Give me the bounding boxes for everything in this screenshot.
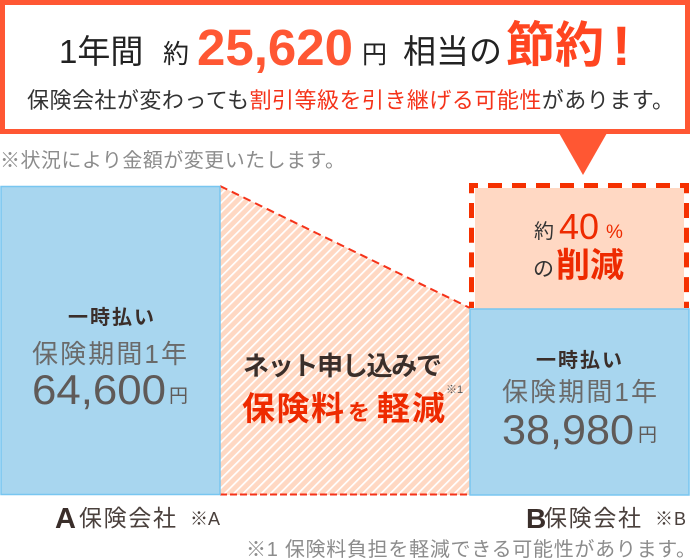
label: company B (526, 503, 687, 534)
panel: hatched saving area: ※1 (446, 384, 463, 396)
panel: hatched saving area: 保険料 (242, 390, 344, 427)
panel: company B reduction box (469, 183, 689, 309)
label: company A (55, 503, 220, 535)
panel: company B bar: 円 (638, 425, 657, 446)
panel: hatched saving area: ネット申し込みで (243, 351, 442, 381)
panel: hatched saving area: を (348, 400, 370, 425)
label: company B: B (526, 503, 546, 534)
panel: company B bar: 38,980 (502, 406, 634, 453)
callout: savings headline: 25,620 (197, 19, 353, 76)
panel: company A bar (1, 186, 220, 494)
panel: company A bar: 保険期間1年 (32, 339, 187, 369)
panel: hatched saving area (220, 186, 470, 495)
callout: savings headline: ! (612, 14, 631, 77)
panel: company B reduction box: 削減 (556, 247, 624, 285)
label: company B: 保険会社 (544, 505, 641, 531)
callout: savings headline: 円 (362, 41, 387, 69)
panel: company B bar: 一時払い (536, 349, 622, 372)
panel: company A bar: 64,600 (32, 366, 166, 413)
label: company A: 保険会社 (79, 505, 176, 531)
label: company B: ※B (655, 509, 687, 529)
panel: company B bar: 保険期間1年 (502, 377, 657, 407)
note: amounts may vary: ※状況により金額が変更いたします。 (0, 149, 345, 172)
label: company A: A (55, 503, 76, 535)
callout: savings headline: 保険会社が変わっても割引等級を引き継げる可能性があります。 (27, 88, 674, 113)
panel: company A bar: 一時払い (68, 306, 154, 329)
panel: company B reduction box: 40 (559, 206, 599, 247)
panel: company B bar (470, 309, 689, 495)
label: company A: ※A (190, 509, 220, 529)
panel: company B reduction box: 約 (534, 220, 554, 243)
callout: savings headline: 節約 (506, 19, 604, 73)
callout: savings headline: 約 (163, 39, 189, 69)
callout: savings headline: 相当の (403, 33, 502, 70)
callout: savings headline: 1年間 (59, 33, 143, 70)
callout: savings headline (2, 2, 688, 175)
panel: company B reduction box: の (533, 258, 554, 281)
panel: hatched saving area: 軽減 (377, 390, 445, 427)
panel: company A bar: 円 (169, 386, 188, 407)
panel: company B reduction box: % (606, 222, 623, 243)
